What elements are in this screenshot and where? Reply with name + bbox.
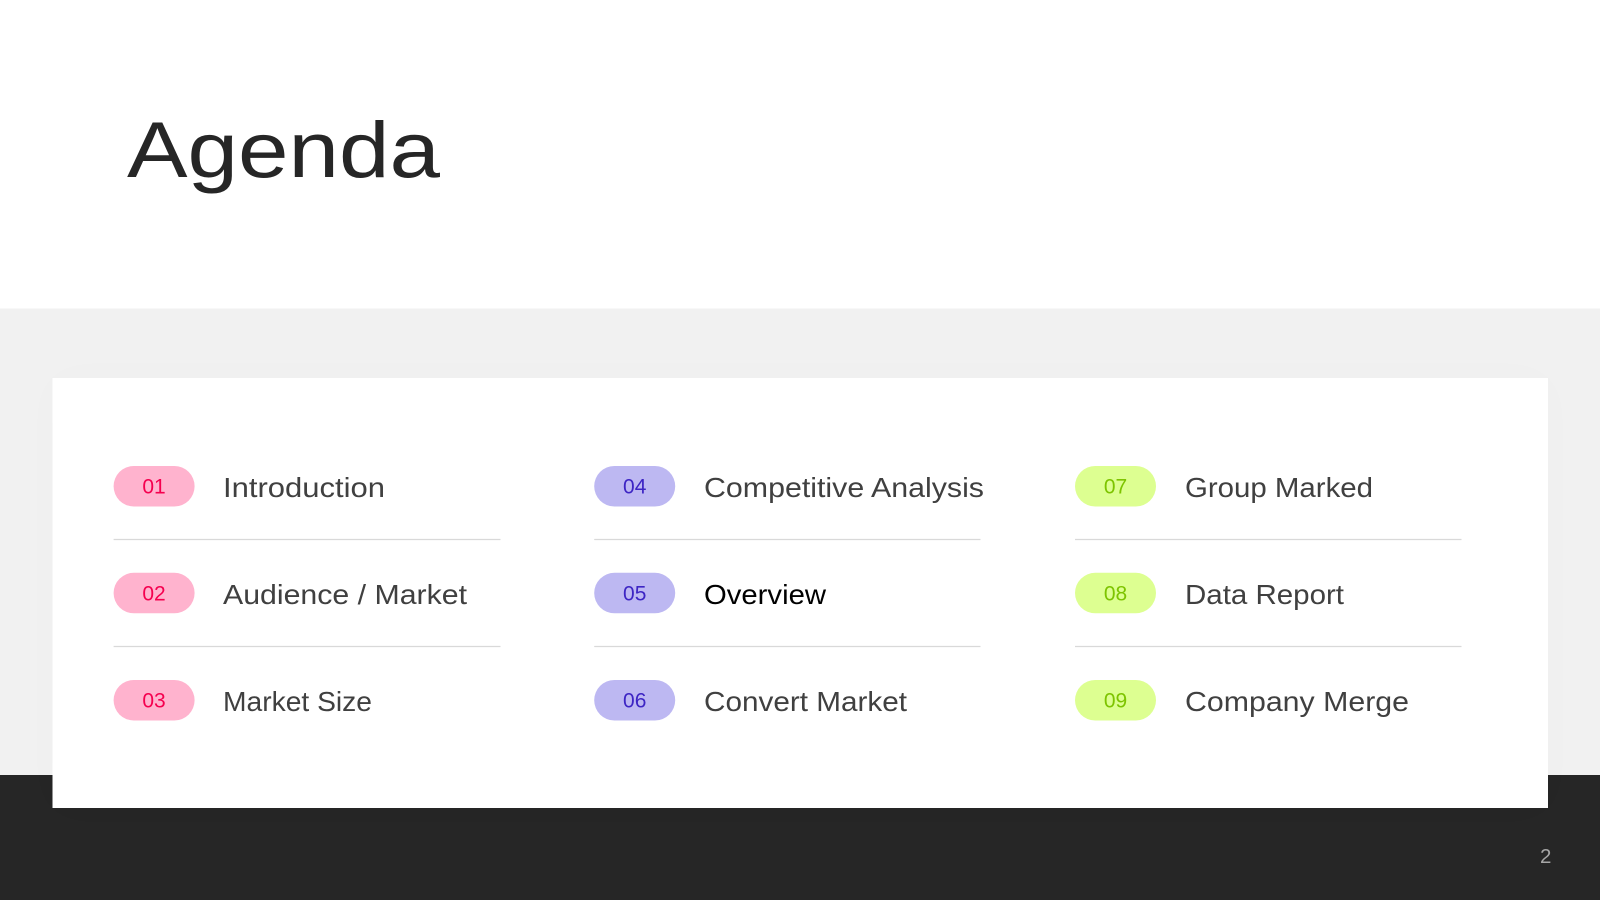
item 06 [594, 680, 907, 720]
panel: card shadow [52, 378, 1548, 808]
item 09: 09 [1104, 690, 1127, 712]
item 09: Company Merge [1185, 686, 1409, 717]
item 01 [114, 466, 385, 506]
item 03: Market Size [223, 686, 372, 717]
item 03: 03 [142, 690, 166, 712]
dark footer band [0, 775, 1600, 900]
item 04 [594, 466, 984, 506]
item 06: Convert Market [704, 686, 907, 717]
item 05 [594, 573, 827, 613]
item 02 [114, 573, 467, 613]
panel: agenda card [52, 378, 1548, 808]
item 09 [1075, 680, 1409, 720]
item 06: 06 [623, 690, 646, 712]
item 02: Audience / Market [223, 579, 467, 610]
column: items 01 to 03 [114, 466, 500, 720]
white header background [0, 0, 1600, 308]
item 07: Group Marked [1185, 472, 1373, 503]
column: items 07 to 09 [1075, 466, 1462, 720]
item 07: 07 [1104, 476, 1127, 498]
item 05: 05 [623, 582, 646, 606]
item 04: Competitive Analysis [704, 472, 984, 503]
title: Agenda [127, 105, 440, 194]
item 08 [1075, 573, 1344, 613]
item 01: 01 [142, 476, 166, 498]
item 04: 04 [623, 476, 647, 498]
column: items 04 to 06 [594, 466, 984, 720]
item 08: 08 [1104, 582, 1127, 606]
item 07 [1075, 466, 1373, 506]
page number: 2 [1540, 845, 1551, 868]
item 05: Overview [704, 579, 827, 610]
item 08: Data Report [1185, 579, 1344, 610]
item 02: 02 [142, 582, 166, 606]
item 03 [114, 680, 372, 720]
grey band [0, 308, 1600, 775]
item 01: Introduction [223, 472, 385, 503]
